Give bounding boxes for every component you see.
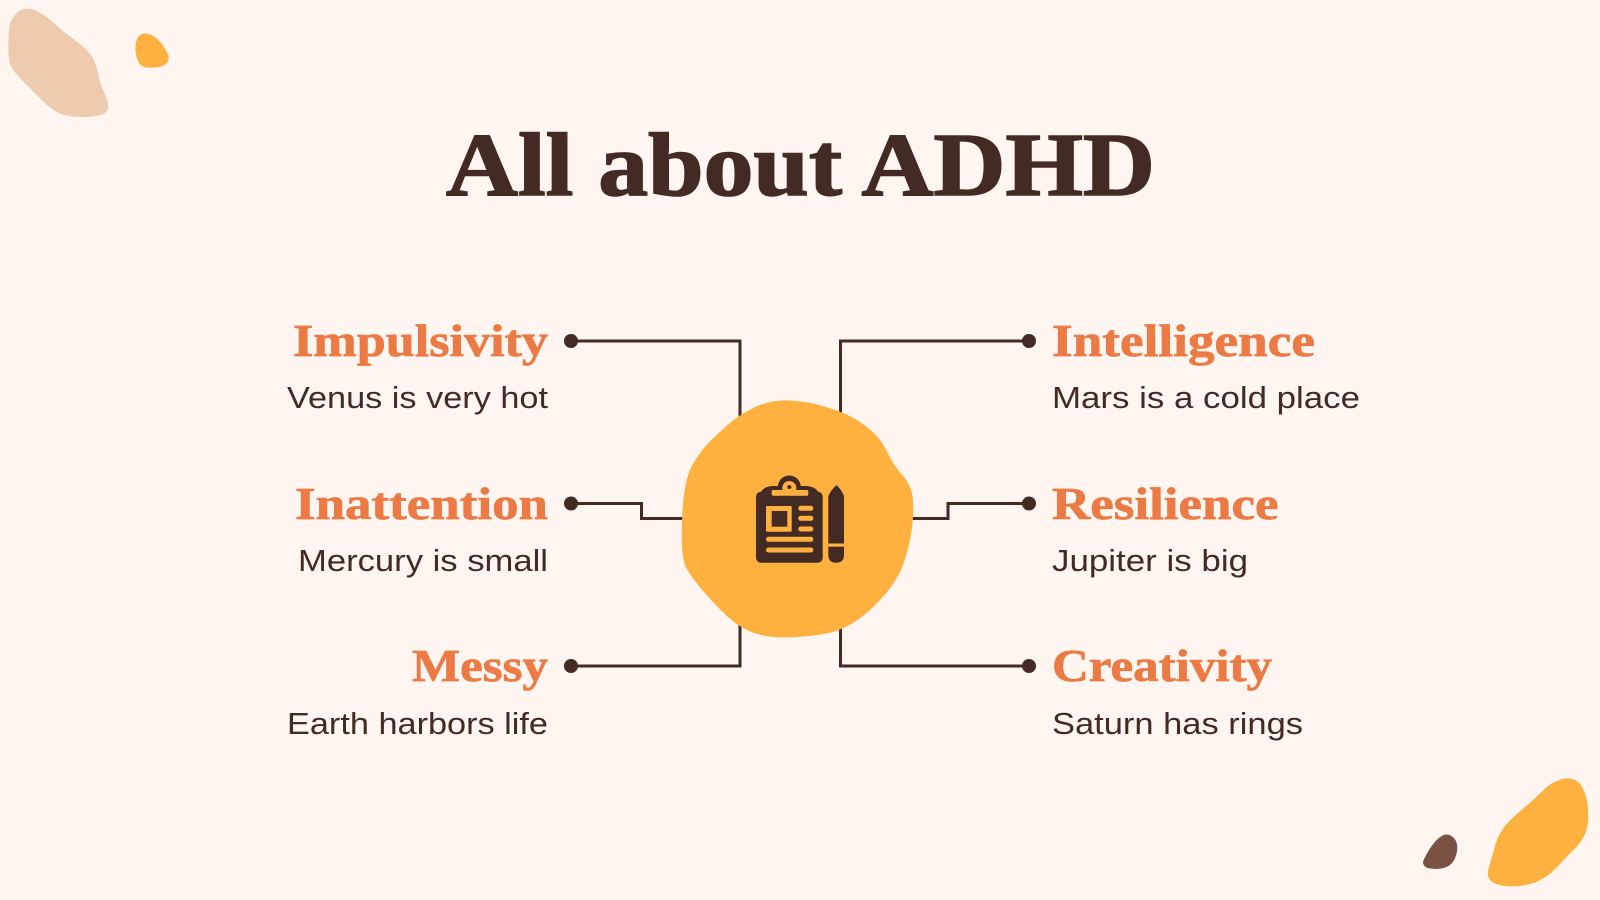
title: All about ADHD — [446, 116, 1155, 215]
connector: Resilience — [905, 496, 1036, 518]
item: Impulsivity: Impulsivity — [293, 315, 548, 366]
connector: Intelligence — [840, 334, 1036, 420]
item: Messy: Earth harbors life — [287, 706, 548, 741]
connector: Messy — [564, 620, 740, 673]
item: Messy — [287, 640, 548, 741]
icon: clipboard and pencil — [756, 476, 844, 563]
item: Impulsivity: Venus is very hot — [287, 380, 548, 415]
item: Inattention: Mercury is small — [298, 543, 548, 578]
item: Inattention — [295, 478, 548, 578]
connector: Impulsivity — [564, 334, 740, 420]
item: Creativity — [1052, 640, 1303, 741]
item: Creativity: Saturn has rings — [1052, 706, 1303, 741]
connector: Creativity — [840, 620, 1036, 673]
item: Creativity: Creativity — [1052, 640, 1272, 691]
item: Intelligence: Intelligence — [1052, 315, 1315, 366]
decorative blob: brown bottom right — [1423, 834, 1457, 869]
item: Intelligence: Mars is a cold place — [1052, 380, 1360, 415]
item: Impulsivity — [287, 315, 548, 415]
item: Messy: Messy — [412, 640, 548, 691]
item: Intelligence — [1052, 315, 1360, 415]
item: Inattention: Inattention — [295, 478, 548, 529]
item: Resilience: Resilience — [1052, 478, 1278, 529]
central orange blob — [682, 400, 913, 637]
connector: Inattention — [564, 496, 690, 518]
item: Resilience: Jupiter is big — [1052, 543, 1248, 578]
item: Resilience — [1052, 478, 1278, 578]
decorative blob: orange top left — [135, 33, 169, 68]
decorative blob: peach top left — [8, 9, 108, 117]
decorative blob: orange bottom right — [1488, 778, 1588, 886]
